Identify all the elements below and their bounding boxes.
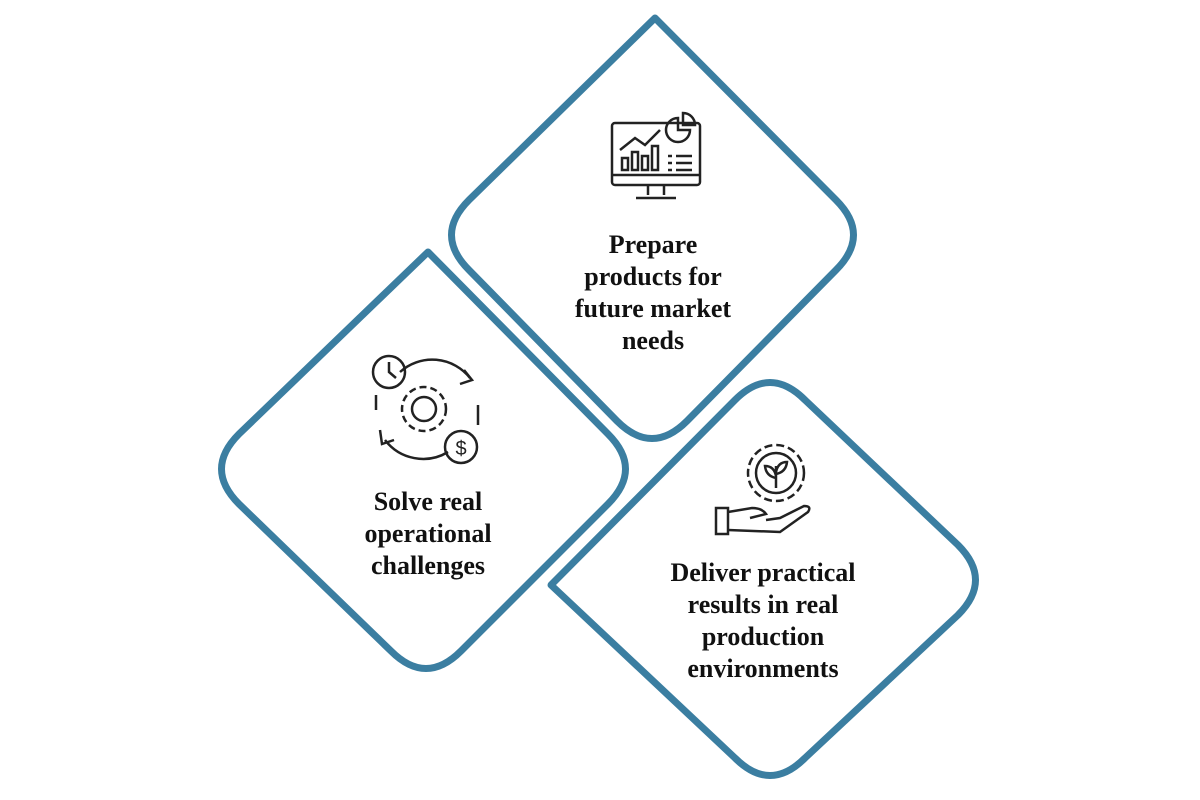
panel: top diamond	[452, 18, 854, 438]
icon: monitor chart	[612, 113, 700, 198]
text: top diamond: Prepare products for future market needs	[575, 230, 731, 355]
icon: gear cycle: $	[455, 438, 467, 460]
panel: right diamond	[551, 382, 976, 776]
icon: hand with gear plant	[716, 445, 809, 534]
text: left diamond: Solve real operational challenges	[364, 487, 492, 580]
icon: gear cycle	[373, 356, 478, 463]
panel: left diamond	[222, 252, 626, 668]
text: right diamond: Deliver practical results in real production environments	[670, 558, 856, 683]
